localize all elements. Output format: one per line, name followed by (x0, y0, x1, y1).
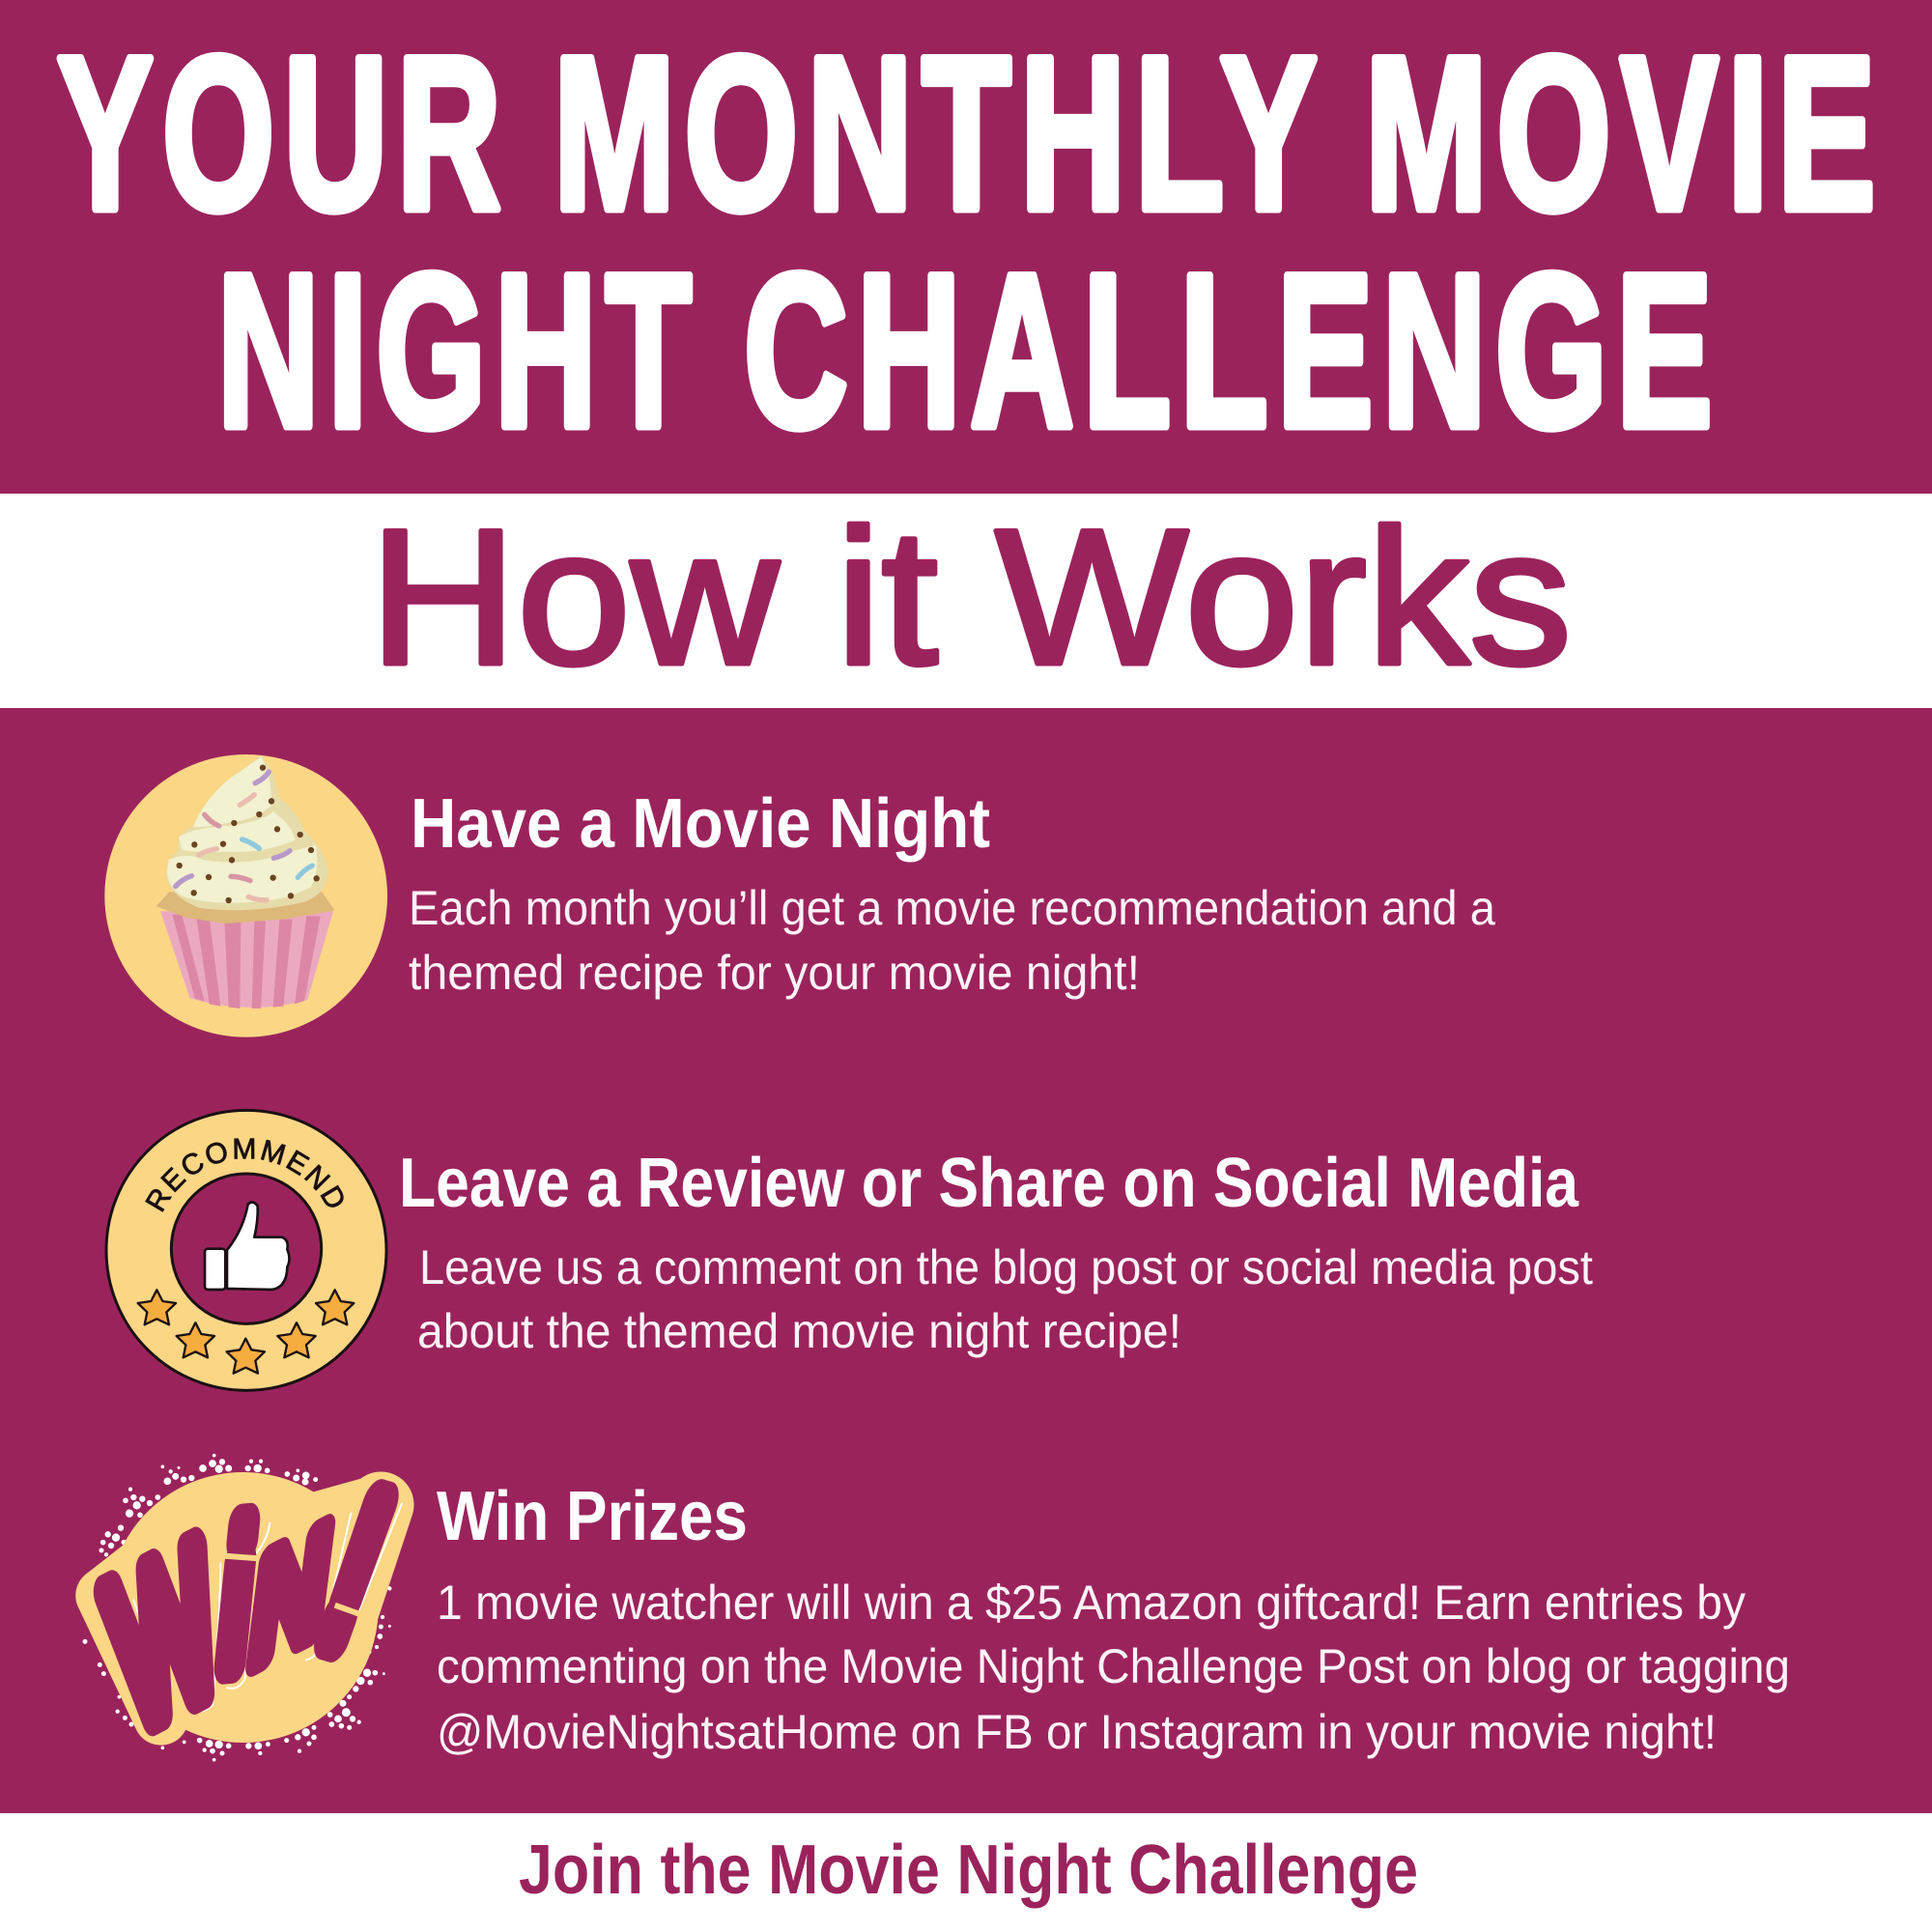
icon: win burst: N (244, 1494, 337, 1696)
footer: Join the Movie Night Challenge: Join the Movie Night Challenge (519, 1832, 1418, 1909)
icon: cupcake (104, 754, 387, 1037)
footer: Join the Movie Night Challenge (0, 1813, 1932, 1932)
text: step 1 description (409, 881, 1495, 1000)
title (57, 11, 1885, 472)
title: NIGHT (217, 228, 700, 472)
text: step 1 description: themed recipe for your movie night! (409, 946, 1140, 1000)
title: YOUR (57, 11, 510, 255)
heading: Leave a Review or Share on Social Media: Leave a Review or Share on Social Media (399, 1145, 1579, 1222)
icon: recommend badge (104, 1109, 388, 1392)
text: step 1 description: Each month you’ll get a movie recommendation and a (409, 881, 1495, 935)
heading: Have a Movie Night: Have a Movie Night (411, 785, 990, 863)
text: step 2 description: about the themed movie night recipe! (417, 1304, 1181, 1358)
icon: win burst (83, 1454, 408, 1770)
text: step 3 description: commenting on the Movie Night Challenge Post on blog or tagging (437, 1639, 1790, 1693)
icon: win burst: i (214, 1489, 259, 1706)
icon: recommend badge: RECOMMEND (145, 1138, 344, 1212)
title: MONTHLY (554, 11, 1326, 255)
icon: win burst: ! (305, 1458, 408, 1683)
heading: Win Prizes: Win Prizes (437, 1478, 748, 1555)
banner: How it Works (0, 490, 1932, 708)
text: step 3 description: @MovieNightsatHome on FB or Instagram in your movie night! (437, 1705, 1717, 1759)
text: step 3 description: 1 movie watcher will win a $25 Amazon giftcard! Earn entries by (437, 1576, 1746, 1630)
text: step 2 description: Leave us a comment on the blog post or social media post (419, 1240, 1593, 1294)
icon: win burst: W (95, 1505, 234, 1770)
text: step 2 description (417, 1240, 1593, 1358)
banner: How it Works: How it Works (369, 490, 1572, 705)
text: step 3 description (437, 1576, 1790, 1759)
